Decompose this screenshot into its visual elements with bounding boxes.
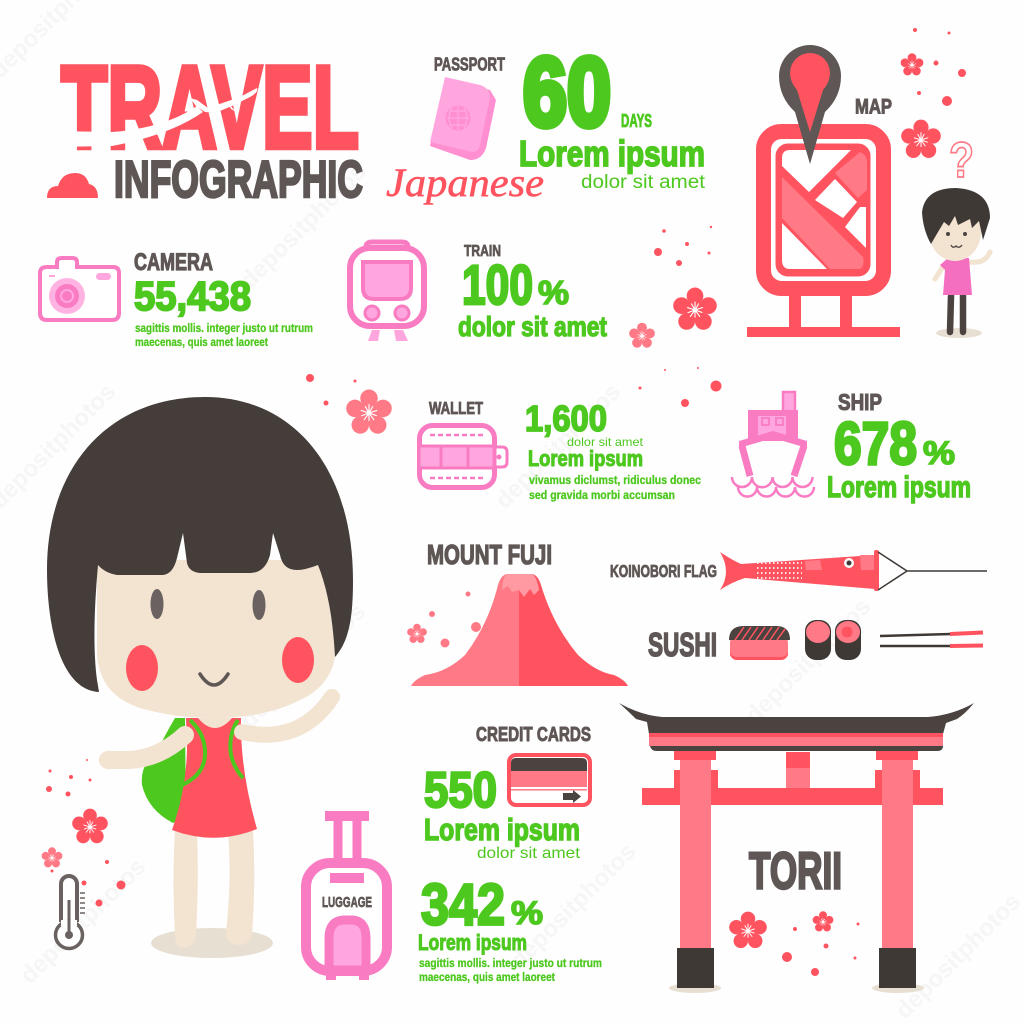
panel: ship: Lorem ipsum <box>827 471 971 504</box>
text: 60 days: dolor sit amet <box>581 172 706 193</box>
character: boy with question mark <box>922 132 990 338</box>
panel: credit cards: Lorem ipsum <box>424 812 580 847</box>
text: 342 percent: 342 <box>421 872 505 938</box>
panel: passport: PASSPORT <box>434 54 505 74</box>
panel: koinobori flag: KOINOBORI FLAG <box>610 561 717 581</box>
panel: Mount Fuji <box>411 539 628 686</box>
text: 60 days: Lorem ipsum <box>519 133 705 174</box>
panel: koinobori flag <box>610 550 987 591</box>
panel: train: % <box>538 274 569 311</box>
panel: train <box>350 242 607 342</box>
panel: wallet: Lorem ipsum <box>528 446 643 471</box>
panel: torii gate <box>619 703 974 993</box>
decoration: cherry blossoms near train <box>629 226 717 348</box>
text: depositphotos <box>15 853 151 989</box>
text: 60 days: DAYS <box>621 111 652 131</box>
text: depositphotos <box>235 158 371 294</box>
decoration: cherry blossoms centre <box>306 367 722 434</box>
title: Travel Infographic: INFOGRAPHIC <box>114 151 363 209</box>
panel: torii gate: TORII <box>749 842 842 900</box>
panel: train: dolor sit amet <box>458 311 607 342</box>
panel: camera <box>40 249 313 349</box>
decoration: cherry blossoms near Fuji <box>407 592 481 648</box>
panel: wallet: WALLET <box>429 398 483 418</box>
panel: credit cards: dolor sit amet <box>477 845 581 862</box>
text: 342 percent: sagittis mollis. integer justo ut rutrum <box>419 956 602 970</box>
panel: credit cards: 550 <box>424 762 497 818</box>
panel: credit cards <box>424 724 591 862</box>
text: depositphotos <box>890 888 1024 1024</box>
panel: map <box>747 45 900 337</box>
panel: camera: sagittis mollis. integer justo ut rutrum <box>135 323 313 335</box>
decoration: cherry blossoms lower left <box>42 759 126 906</box>
panel: ship <box>732 389 971 504</box>
script text: Japanese: Japanese <box>386 160 544 205</box>
panel: sushi: SUSHI <box>648 626 717 663</box>
panel: wallet: vivamus diclumst, ridiculus donec <box>529 473 701 487</box>
panel: camera: CAMERA <box>134 249 213 276</box>
panel: camera: 55,438 <box>134 273 251 319</box>
text: 60 days <box>519 38 706 193</box>
panel: passport <box>430 54 505 160</box>
panel: luggage <box>306 811 387 980</box>
panel: ship: SHIP <box>838 389 882 415</box>
text: depositphotos <box>505 838 641 974</box>
text: 342 percent: maecenas, quis amet laoreet <box>419 970 555 984</box>
text: 60 days: 60 <box>523 38 611 146</box>
panel: train: TRAIN <box>464 243 501 260</box>
panel: ship: % <box>923 435 955 471</box>
character: girl with backpack <box>47 397 353 958</box>
text: 342 percent: Lorem ipsum <box>418 930 527 955</box>
title: Travel Infographic <box>47 42 363 209</box>
text: depositphotos <box>235 598 371 734</box>
text: 342 percent: % <box>511 895 543 931</box>
decoration: cherry blossoms top right <box>901 28 966 158</box>
title: Travel Infographic: TRAVEL <box>61 42 359 172</box>
panel: wallet: sed gravida morbi accumsan <box>529 488 675 502</box>
panel: ship: 678 <box>834 410 917 477</box>
text: 342 percent <box>418 872 602 984</box>
decoration: cherry blossoms under torii <box>729 911 860 976</box>
text: depositphotos <box>490 378 626 514</box>
panel: Mount Fuji: MOUNT FUJI <box>427 539 552 570</box>
panel: wallet: dolor sit amet <box>567 435 644 449</box>
panel: camera: maecenas, quis amet laoreet <box>135 337 268 349</box>
character: boy with question mark: ? <box>949 132 974 188</box>
panel: sushi <box>648 620 983 663</box>
icon: thermometer <box>56 876 85 948</box>
text: depositphotos <box>740 593 876 729</box>
panel: wallet: 1,600 <box>525 398 607 439</box>
panel: map: MAP <box>855 96 892 118</box>
panel: credit cards: CREDIT CARDS <box>476 724 591 746</box>
panel: wallet <box>419 398 701 502</box>
panel: train: 100 <box>462 253 533 316</box>
panel: luggage: LUGGAGE <box>322 895 372 911</box>
